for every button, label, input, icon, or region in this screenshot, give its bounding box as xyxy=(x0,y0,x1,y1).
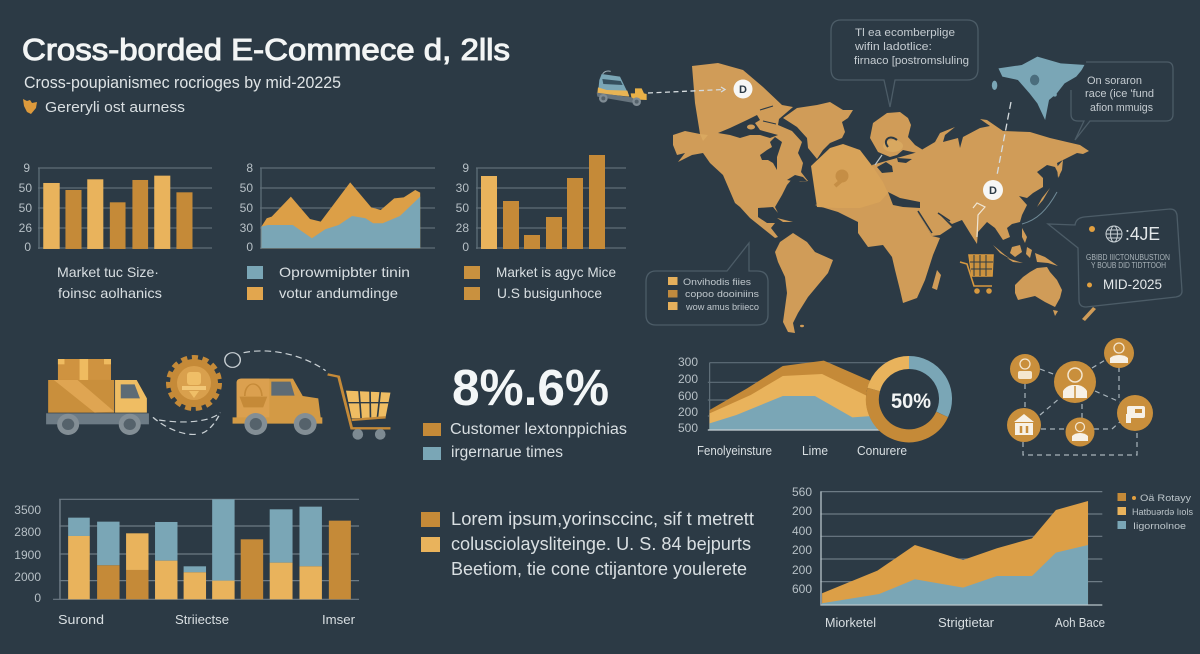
panel: area chart with donut: 500 xyxy=(678,421,698,435)
panel: area chart 2: 30 xyxy=(240,221,253,235)
text block with legend: Lorem ipsum,yorinsccinc, sif t metrett xyxy=(451,509,754,529)
panel: bar chart 3: U.S busigunhoce xyxy=(497,285,602,301)
map routes xyxy=(973,102,1057,237)
icon: shopping cart xyxy=(328,374,390,440)
marker D Asia: D xyxy=(989,185,997,197)
panel: area chart with donut: 300 xyxy=(678,355,698,369)
panel: large area chart: Aoh Bace xyxy=(1055,615,1105,630)
icon: small delivery truck xyxy=(597,71,647,106)
panel: bar chart 1: 50 xyxy=(19,181,32,195)
legend xyxy=(1118,493,1193,531)
callout: stat xyxy=(1048,209,1182,307)
world map xyxy=(673,57,1096,333)
panel: large area chart: Miorketel xyxy=(825,615,876,630)
stat legend: Customer lextonppichias xyxy=(450,421,627,438)
panel: area chart 2: 50 xyxy=(240,201,253,215)
panel: bar chart 3: 9 xyxy=(462,161,469,175)
South America xyxy=(775,233,833,333)
panel: stacked bar chart: 2000 xyxy=(14,570,41,584)
panel: large area chart xyxy=(792,485,1193,630)
panel: area chart with donut: 200 xyxy=(678,405,698,419)
panel: stacked bar chart: Surond xyxy=(58,612,104,627)
node: top-left person xyxy=(1010,354,1040,384)
panel: area chart with donut: Lime xyxy=(802,444,828,458)
Scandinavia blob xyxy=(870,112,923,165)
panel: large area chart: 200 xyxy=(792,563,812,577)
title: Cross-borded E-Commece d, 2lls xyxy=(22,32,510,67)
donut chart 50% xyxy=(866,356,952,442)
panel: bar chart 1: 50 xyxy=(19,201,32,215)
panel: stacked bar chart xyxy=(14,499,359,627)
icon: map shopping cart xyxy=(960,255,993,293)
logistics illustration xyxy=(46,351,390,440)
panel: large area chart: 200 xyxy=(792,504,812,518)
icon: gear xyxy=(169,358,219,408)
text block with legend: Beetiom, tie cone ctijantore youlerete xyxy=(451,559,747,579)
callout: stat: GBIBD IIICTONUBUSTION xyxy=(1086,253,1170,262)
panel: stacked bar chart: 0 xyxy=(34,591,41,605)
marker D North: D xyxy=(739,84,747,96)
panel: area chart 2: Oprowmipbter tinin xyxy=(279,264,410,280)
icon: globe xyxy=(1106,226,1122,242)
panel: bar chart 3: Market is agyc Mice xyxy=(496,264,616,280)
callout: right: race (ice 'fund xyxy=(1085,88,1154,100)
panel: large area chart: 200 xyxy=(792,543,812,557)
text block with legend xyxy=(421,509,754,579)
panel: bar chart 3: 30 xyxy=(456,181,469,195)
callout: map legend xyxy=(646,243,768,325)
panel: area chart with donut: Fenolyeinsture xyxy=(697,444,772,458)
panel: stacked bar chart: 1900 xyxy=(14,548,41,562)
panel: area chart 2: 0 xyxy=(246,240,253,254)
subtitle: Cross-poupianismec rocrioges by mid-20225 xyxy=(24,73,341,92)
panel: area chart with donut: 200 xyxy=(678,372,698,386)
Eurasia xyxy=(872,119,1089,244)
panel: bar chart 1 xyxy=(19,161,212,301)
panel: area chart 2: 8 xyxy=(246,161,253,175)
callout: map legend: copoo dooiniins xyxy=(685,289,759,300)
panel: bar chart 3: 28 xyxy=(456,221,469,235)
callout: right xyxy=(1071,62,1173,140)
subheading with icon: Gereryli ost aurness xyxy=(45,99,185,116)
islands xyxy=(777,160,1096,321)
stat legend xyxy=(423,421,627,461)
inland seas xyxy=(877,158,950,233)
panel: bar chart 3: 50 xyxy=(456,201,469,215)
panel: large area chart: Strigtietar xyxy=(938,615,995,630)
callout: top: wifin ladotlice: xyxy=(854,41,932,53)
callout: map legend: wow amus briieco xyxy=(685,302,759,313)
panel: large area chart: 400 xyxy=(792,524,812,538)
callout: stat: :4JE xyxy=(1125,224,1160,244)
big stat: 8%.6% xyxy=(452,359,609,416)
callout: right: afion mmuigs xyxy=(1090,102,1153,114)
callout: stat: MID-2025 xyxy=(1103,276,1162,292)
legend: Oä Rotayy xyxy=(1140,493,1192,503)
panel: bar chart 1: 0 xyxy=(24,240,31,254)
callout: top xyxy=(831,20,978,107)
panel: stacked bar chart: 2800 xyxy=(14,525,41,539)
North America xyxy=(673,63,808,238)
panel: area chart with donut: 600 xyxy=(678,389,698,403)
donut chart 50%: 50% xyxy=(891,390,931,413)
node: bottom person xyxy=(1066,418,1094,446)
panel: area chart 2: 50 xyxy=(240,181,253,195)
panel: stacked bar chart: 3500 xyxy=(14,503,41,517)
panel: large area chart: 560 xyxy=(792,485,812,499)
marker D Asia xyxy=(983,180,1003,200)
panel: bar chart 1: 9 xyxy=(23,161,30,175)
arrow: truck to marker xyxy=(648,87,725,93)
panel: area chart with donut: Conurere xyxy=(857,444,907,458)
Africa xyxy=(815,190,940,303)
arrows: dashed flow xyxy=(153,351,326,434)
icon: delivery van xyxy=(233,379,322,435)
panel: bar chart 3 xyxy=(456,155,626,301)
callout: stat: Y BOUB DID TIDTTOOH xyxy=(1091,261,1166,270)
panel: large area chart: 600 xyxy=(792,582,812,596)
marker D North xyxy=(734,80,752,98)
stat legend: irgernarue times xyxy=(451,444,563,461)
Greenland xyxy=(783,102,853,159)
panel: bar chart 1: Market tuc Size· xyxy=(57,264,159,280)
Australia xyxy=(1015,267,1062,307)
panel: bar chart 1: foinsc aolhanics xyxy=(58,285,162,301)
legend: Iigornolnoe xyxy=(1133,521,1186,531)
callout: top: firnaco [postromsluling xyxy=(854,55,969,67)
callout: right: On soraron xyxy=(1087,75,1142,87)
callout: map legend: Onvihodis fiies xyxy=(683,277,751,288)
Asia inset in blue xyxy=(992,57,1086,120)
text block with legend: colusciolaysliteinge. U. S. 84 bejpurts xyxy=(451,534,751,554)
icon: cargo truck xyxy=(46,359,149,435)
icon: orange tag xyxy=(23,99,37,114)
Europe/West Africa panel xyxy=(811,144,888,208)
panel: stacked bar chart: Imser xyxy=(322,612,356,627)
panel: area chart 2: votur andumdinge xyxy=(279,285,398,301)
node: building xyxy=(1007,408,1041,442)
node: card icon xyxy=(1117,395,1153,431)
panel: area chart 2 xyxy=(240,161,435,301)
network diagram xyxy=(1007,338,1153,455)
panel: bar chart 3: 0 xyxy=(462,240,469,254)
panel: area chart with donut xyxy=(678,355,952,458)
panel: bar chart 1: 26 xyxy=(19,221,32,235)
node: center person xyxy=(1054,361,1096,403)
legend: Hatbuərdə lıols xyxy=(1132,507,1193,517)
node: top-right person xyxy=(1104,338,1134,368)
panel: stacked bar chart: Striiectse xyxy=(175,612,229,627)
callout: top: Tl ea ecomberplige xyxy=(855,27,955,39)
